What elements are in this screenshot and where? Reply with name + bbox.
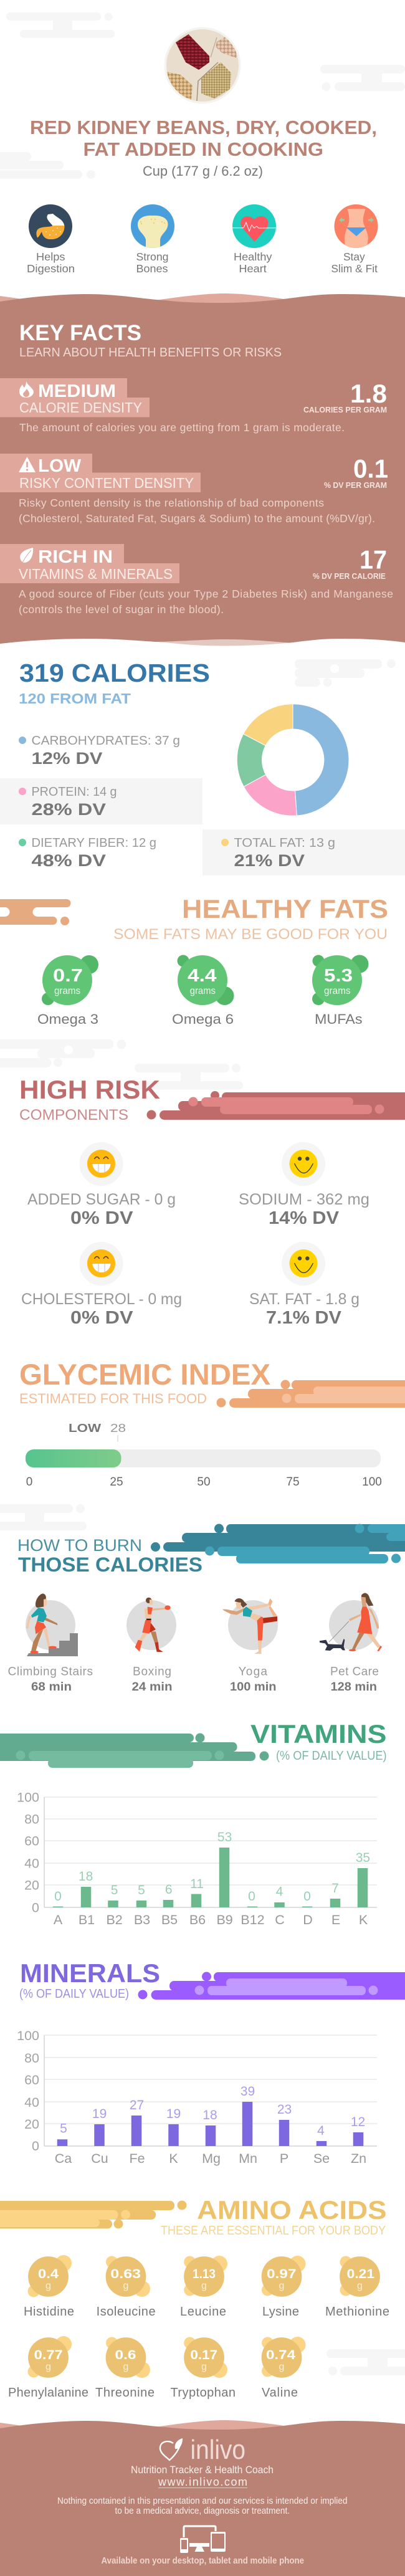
heading: high risk: HIGH RISK — [19, 1075, 160, 1104]
bar chart: vitamins: 5 — [138, 1883, 145, 1897]
component: sodium — [239, 1142, 369, 1228]
fact: rich in vitamins and minerals — [0, 544, 393, 616]
decorative bars — [217, 1380, 405, 1408]
label: strong bones — [136, 250, 168, 275]
disclaimer — [57, 2496, 348, 2516]
label: stay slim and fit: Stay — [343, 250, 365, 263]
bar chart: minerals: 18 — [202, 2108, 217, 2122]
panel: footer — [0, 2420, 405, 2576]
donut chart — [237, 704, 349, 816]
bar chart: vitamins: 0 — [303, 1889, 311, 1904]
amino: tryptophan: Tryptophan — [171, 2386, 236, 2400]
bar chart: minerals: 39 — [241, 2084, 255, 2099]
component: sodium: SODIUM - 362 mg — [239, 1191, 369, 1208]
fact: rich in vitamins and minerals: 17 — [360, 545, 387, 575]
label: climbing stairs: 68 min — [31, 1681, 72, 1694]
amino: valine: Valine — [262, 2386, 298, 2400]
label: boxing: Boxing — [133, 1665, 171, 1679]
decorative cloud — [0, 1504, 87, 1530]
fact: rich in vitamins and minerals: (controls the level of sugar in the blood). — [19, 603, 224, 616]
legend: protein: 28% DV — [31, 800, 106, 819]
heading: glycemic index: GLYCEMIC INDEX — [19, 1358, 270, 1391]
gauge scale: 100 — [362, 1476, 382, 1489]
heading: amino acids: AMINO ACIDS — [197, 2195, 386, 2225]
logo: inlivo — [160, 2435, 245, 2465]
component: saturated fat: SAT. FAT - 1.8 g — [249, 1290, 360, 1308]
amino: lysine — [262, 2256, 305, 2319]
label: pet care: Pet Care — [330, 1665, 379, 1679]
bar chart: vitamins: 18 — [79, 1869, 93, 1884]
bar chart: vitamins: D — [303, 1912, 313, 1927]
label: pet care — [330, 1665, 379, 1694]
heading: healthy fats: HEALTHY FATS — [182, 894, 388, 923]
bar chart: vitamins: 11 — [190, 1877, 204, 1891]
amino: threonine: Threonine — [95, 2386, 155, 2400]
bar chart: vitamins: B1 — [79, 1912, 95, 1927]
component: sodium: 14% DV — [269, 1208, 340, 1228]
bar chart: vitamins: 0 — [248, 1889, 255, 1904]
title: FAT ADDED IN COOKING — [83, 139, 323, 160]
amino: isoleucine: 0.63 — [110, 2267, 141, 2281]
bar chart: minerals: 23 — [277, 2102, 292, 2117]
decorative bar shape — [0, 899, 71, 925]
bar chart: vitamins: 5 — [111, 1883, 118, 1897]
amino: lysine: 0.97 — [267, 2267, 296, 2281]
amino: histidine: Histidine — [24, 2305, 74, 2319]
fact: risky content density: Risky Content density is the relationship of bad components — [19, 497, 324, 509]
fact: risky content density: % DV PER GRAM — [324, 480, 387, 490]
amino: leucine: 1.13 — [193, 2267, 216, 2281]
bar chart: minerals: 12 — [351, 2115, 365, 2129]
bar chart: vitamins: 53 — [217, 1830, 232, 1844]
gauge scale — [26, 1476, 382, 1489]
decorative bars — [138, 1972, 405, 2000]
bar chart: minerals: 60 — [24, 2073, 39, 2087]
fact: risky content density: LOW — [38, 456, 82, 476]
amino: leucine — [180, 2256, 227, 2319]
legend: carbohydrates: 12% DV — [31, 749, 102, 768]
stat: mufas — [312, 955, 369, 1027]
bar chart: minerals — [17, 2028, 377, 2166]
bar chart: minerals: Zn — [351, 2151, 366, 2166]
amino: tryptophan: 0.17 — [191, 2348, 217, 2362]
label: pet care: 128 min — [330, 1681, 377, 1694]
fact: rich in vitamins and minerals: VITAMINS & MINERALS — [19, 566, 173, 582]
amino: threonine: g — [123, 2362, 128, 2372]
amino: phenylalanine: g — [45, 2362, 51, 2372]
label: helps digestion: Digestion — [27, 262, 75, 275]
heading: vitamins: VITAMINS — [250, 1719, 386, 1748]
component: added sugar: ADDED SUGAR - 0 g — [27, 1191, 176, 1208]
bar chart: minerals: 19 — [166, 2107, 181, 2121]
bar chart: minerals: 27 — [130, 2098, 144, 2112]
stat: omega 6: grams — [190, 986, 216, 996]
bar chart: vitamins: B9 — [216, 1912, 233, 1927]
legend: protein: PROTEIN: 14 g — [31, 785, 117, 799]
label: helps digestion: Helps — [36, 250, 65, 263]
panel: minerals — [17, 1958, 405, 2166]
icon: slim waist — [334, 204, 378, 248]
label: stay slim and fit: Slim & Fit — [331, 262, 378, 275]
label: boxing — [132, 1665, 172, 1694]
gauge scale: 25 — [110, 1476, 123, 1489]
bar chart: vitamins: 0 — [32, 1901, 39, 1915]
label: stay slim and fit — [331, 250, 378, 275]
subheading: ESTIMATED FOR THIS FOOD — [19, 1391, 207, 1406]
amino: valine — [262, 2337, 305, 2400]
amino: histidine: 0.4 — [38, 2267, 59, 2281]
bar chart: minerals: 40 — [24, 2095, 39, 2110]
panel: calories — [0, 659, 405, 875]
tagline: Nutrition Tracker & Health Coach — [131, 2464, 274, 2476]
icon: warning triangle — [19, 457, 36, 472]
amino: phenylalanine — [8, 2336, 88, 2400]
bar chart: vitamins: B6 — [189, 1912, 206, 1927]
bar chart: minerals: 100 — [17, 2028, 39, 2043]
label: yoga: Yoga — [239, 1665, 267, 1679]
decorative bars — [0, 1734, 269, 1768]
bar chart: vitamins: C — [275, 1912, 285, 1927]
bar chart: minerals: Fe — [129, 2151, 145, 2166]
bar chart: vitamins: B3 — [134, 1912, 150, 1927]
bar chart: vitamins — [17, 1790, 377, 1927]
fact: rich in vitamins and minerals: A good source of Fiber (cuts your Type 2 Diabetes Risk) and Manganese — [19, 588, 393, 600]
fact: calorie density: MEDIUM — [38, 381, 116, 401]
icon: heart — [232, 204, 276, 248]
stat: omega 6 — [172, 955, 234, 1027]
background clouds: top — [0, 12, 405, 179]
fact: risky content density — [0, 454, 388, 525]
bar chart: minerals: 0 — [32, 2139, 39, 2154]
bar chart: vitamins: 7 — [331, 1881, 339, 1896]
label: healthy heart: Heart — [239, 262, 267, 275]
fact: calorie density: The amount of calories you are getting from 1 gram is moderate. — [19, 421, 345, 434]
bar chart: vitamins: 6 — [165, 1882, 173, 1897]
amino: isoleucine: Isoleucine — [97, 2305, 156, 2319]
label: strong bones: Strong — [136, 250, 168, 263]
component: cholesterol — [21, 1242, 182, 1328]
gauge scale: 0 — [26, 1476, 32, 1489]
legend: carbohydrates — [19, 733, 180, 768]
amino: isoleucine: g — [123, 2281, 128, 2291]
fact: rich in vitamins and minerals: % DV PER CALORIE — [313, 571, 386, 581]
stat: mufas: grams — [324, 986, 350, 996]
amino: histidine — [24, 2255, 74, 2319]
bar chart: minerals: 80 — [24, 2051, 39, 2066]
stat: mufas: 5.3 — [324, 966, 353, 986]
label: yoga: 100 min — [230, 1681, 277, 1694]
component: saturated fat: 7.1% DV — [266, 1308, 342, 1328]
stat: omega 6: 4.4 — [188, 966, 217, 986]
amino: tryptophan: g — [201, 2362, 207, 2372]
bar chart: minerals: Se — [313, 2151, 330, 2166]
serving size: Cup (177 g / 6.2 oz) — [143, 163, 263, 179]
panel: how to burn those calories — [0, 1504, 405, 1694]
label: climbing stairs: Climbing Stairs — [7, 1665, 93, 1679]
stat: omega 3 — [37, 955, 98, 1027]
heading — [17, 1536, 202, 1576]
legend: total fat: 21% DV — [234, 851, 305, 870]
bar chart: minerals: K — [169, 2151, 178, 2166]
gauge bar — [26, 1449, 381, 1467]
decorative bars — [151, 1524, 405, 1563]
bar chart: vitamins: A — [54, 1912, 63, 1927]
amino: lysine: g — [279, 2281, 284, 2291]
marker label — [69, 1421, 126, 1442]
component: cholesterol: CHOLESTEROL - 0 mg — [21, 1290, 182, 1308]
subheading: 120 FROM FAT — [19, 690, 131, 707]
legend: carbohydrates: CARBOHYDRATES: 37 g — [31, 733, 180, 748]
fact: calorie density: CALORIE DENSITY — [19, 399, 142, 416]
bar chart: minerals: Ca — [55, 2151, 72, 2166]
activity: yoga — [222, 1598, 278, 1654]
stat: mufas: MUFAs — [315, 1011, 363, 1027]
fact: risky content density: (Cholesterol, Saturated Fat, Sugars & Sodium) to the amount (%DV/gr). — [19, 512, 375, 525]
bar chart: vitamins: 60 — [24, 1833, 39, 1848]
fact: risky content density: 0.1 — [353, 454, 388, 484]
panel: healthy fats — [0, 894, 388, 1027]
heading: 319 calories: 319 CALORIES — [19, 659, 210, 687]
stat: omega 3: Omega 3 — [37, 1011, 98, 1027]
amino: valine: 0.74 — [266, 2348, 295, 2362]
component: cholesterol: 0% DV — [70, 1308, 133, 1328]
panel: glycemic index — [19, 1358, 405, 1489]
bar chart: vitamins: 40 — [24, 1856, 39, 1871]
stat: omega 3: 0.7 — [53, 966, 83, 986]
legend: total fat: TOTAL FAT: 13 g — [234, 836, 335, 850]
bar chart: vitamins: 35 — [356, 1851, 370, 1865]
legend: dietary fiber: DIETARY FIBER: 12 g — [31, 836, 156, 850]
label: yoga — [230, 1665, 277, 1694]
subheading: (% OF DAILY VALUE) — [276, 1749, 386, 1763]
panel: vitamins — [0, 1719, 386, 1927]
subheading: SOME FATS MAY BE GOOD FOR YOU — [113, 926, 388, 943]
icon: digestion — [29, 204, 72, 248]
bar chart: minerals: 4 — [317, 2124, 325, 2138]
panel: amino acids — [0, 2195, 405, 2400]
fact: rich in vitamins and minerals: RICH IN — [38, 547, 113, 567]
amino: methionine: 0.21 — [347, 2267, 374, 2281]
amino: methionine — [325, 2256, 389, 2319]
bar chart: vitamins: 20 — [24, 1878, 39, 1893]
subheading: COMPONENTS — [19, 1107, 128, 1123]
amino: methionine: Methionine — [325, 2305, 389, 2319]
bar chart: vitamins: E — [331, 1912, 340, 1927]
bar chart: vitamins: B5 — [161, 1912, 178, 1927]
component: saturated fat — [249, 1242, 360, 1328]
icon: devices — [180, 2526, 226, 2553]
stat: omega 3: grams — [54, 986, 80, 996]
bar chart: vitamins: B2 — [106, 1912, 123, 1927]
legend: dietary fiber: 48% DV — [31, 851, 106, 870]
food photo: bags of beans — [164, 27, 241, 103]
label: boxing: 24 min — [132, 1681, 172, 1694]
fact: calorie density: 1.8 — [350, 379, 387, 408]
amino: histidine: g — [45, 2281, 51, 2291]
amino: threonine — [95, 2337, 155, 2400]
bar chart: vitamins: 80 — [24, 1812, 39, 1827]
label: strong bones: Bones — [136, 262, 168, 275]
decorative clouds — [0, 1039, 243, 1089]
amino: leucine: g — [201, 2281, 207, 2291]
component: added sugar — [27, 1142, 176, 1228]
amino: lysine: Lysine — [262, 2305, 299, 2319]
decorative bars — [0, 2201, 187, 2228]
icon: leaf — [20, 548, 33, 563]
decorative cloud — [326, 2349, 405, 2375]
bar chart: minerals: 20 — [24, 2117, 39, 2132]
amino: tryptophan — [171, 2337, 236, 2400]
fact: risky content density: RISKY CONTENT DENSITY — [19, 475, 194, 491]
bar chart: vitamins: K — [359, 1912, 368, 1927]
bar chart: vitamins: 4 — [276, 1884, 284, 1899]
bar chart: vitamins: 100 — [17, 1790, 39, 1805]
fact: calorie density: CALORIES PER GRAM — [303, 405, 387, 414]
fact: calorie density — [0, 378, 387, 434]
heading: HOW TO BURN — [17, 1536, 142, 1555]
marker label: 28 — [110, 1421, 126, 1434]
legend: dietary fiber — [19, 836, 156, 870]
decorative bars — [147, 1091, 405, 1120]
disclaimer: to be a medical advice, diagnosis or treatment. — [115, 2506, 290, 2516]
website link: www.inlivo.com — [158, 2476, 247, 2488]
amino: threonine: 0.6 — [115, 2348, 136, 2362]
bar chart: minerals: P — [280, 2151, 288, 2166]
amino: leucine: Leucine — [180, 2305, 226, 2319]
amino: phenylalanine: Phenylalanine — [8, 2386, 88, 2400]
legend: total fat — [221, 836, 335, 870]
bar chart: minerals: Mg — [202, 2151, 221, 2166]
bar chart: minerals: Cu — [91, 2151, 108, 2166]
logo: inlivo: inlivo — [191, 2435, 245, 2465]
panel: high risk components — [0, 1039, 405, 1328]
activity: pet care — [320, 1593, 382, 1651]
activity: boxing — [126, 1598, 176, 1652]
label: climbing stairs — [7, 1665, 93, 1694]
decorative cloud — [295, 659, 396, 687]
subheading: (% OF DAILY VALUE) — [19, 1987, 129, 2001]
icon: bone — [131, 204, 174, 249]
disclaimer: Nothing contained in this presentation and our services is intended or implied — [57, 2496, 348, 2506]
bar chart: vitamins: 0 — [54, 1889, 62, 1904]
panel: key facts — [0, 293, 405, 651]
activity: climbing stairs — [26, 1593, 78, 1656]
heading: minerals: MINERALS — [20, 1958, 160, 1988]
legend: protein — [19, 785, 117, 819]
heading: THOSE CALORIES — [18, 1553, 202, 1576]
heading: key facts: KEY FACTS — [19, 321, 141, 345]
bar chart: vitamins: B12 — [241, 1912, 265, 1927]
amino: valine: g — [279, 2362, 284, 2372]
label: helps digestion — [27, 250, 75, 275]
subheading: THESE ARE ESSENTIAL FOR YOUR BODY — [161, 2224, 386, 2238]
marker label: LOW — [69, 1421, 102, 1434]
amino: methionine: g — [357, 2281, 363, 2291]
title — [30, 117, 377, 160]
bar chart: minerals: 5 — [60, 2122, 67, 2136]
bar chart: minerals: 19 — [92, 2107, 107, 2121]
stat: omega 6: Omega 6 — [172, 1011, 234, 1027]
bar chart: minerals: Mn — [239, 2151, 257, 2166]
amino: phenylalanine: 0.77 — [34, 2348, 63, 2362]
subheading: LEARN ABOUT HEALTH BENEFITS OR RISKS — [19, 346, 282, 360]
title: RED KIDNEY BEANS, DRY, COOKED, — [30, 117, 377, 138]
component: added sugar: 0% DV — [70, 1208, 133, 1228]
icon: flame — [19, 381, 34, 398]
benefit icons row — [27, 204, 378, 275]
amino: isoleucine — [97, 2256, 156, 2319]
gauge scale: 50 — [197, 1476, 211, 1489]
availability note: Available on your desktop, tablet and mobile phone — [101, 2555, 304, 2566]
legend highlight boxes — [0, 778, 405, 875]
gauge scale: 75 — [286, 1476, 300, 1489]
label: healthy heart — [234, 250, 272, 275]
label: healthy heart: Healthy — [234, 250, 272, 263]
